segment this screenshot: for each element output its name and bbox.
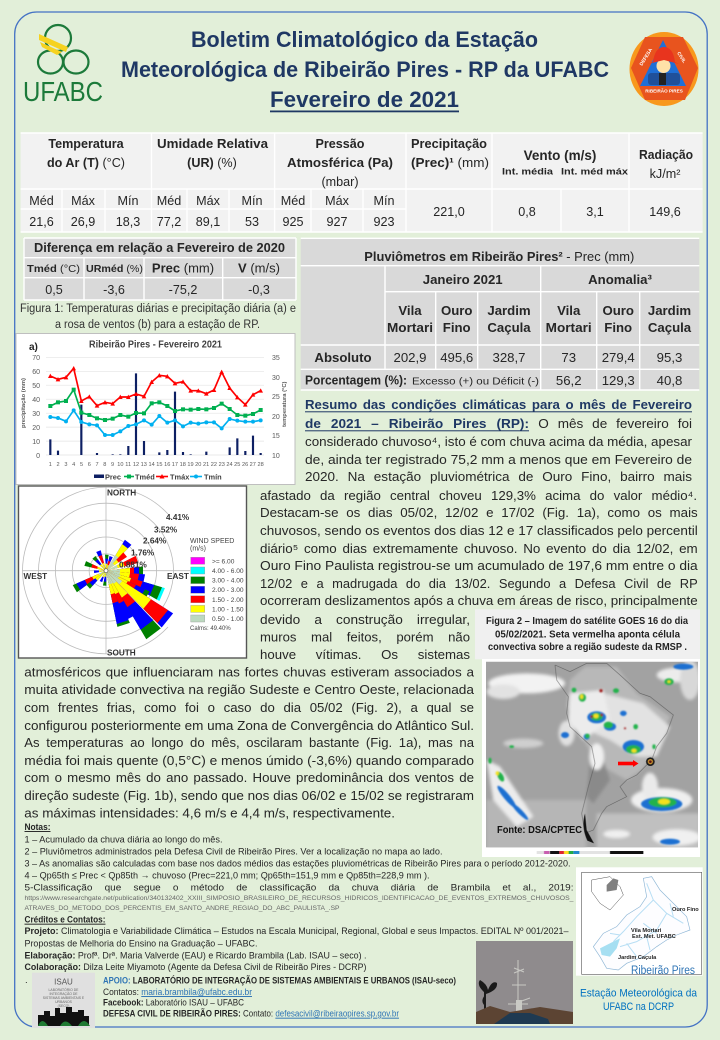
narrative lines: O mês de fevereiro foi <box>538 416 692 431</box>
percentage labels: 1.76% <box>131 549 155 558</box>
table values: Máx <box>196 194 221 208</box>
logo: ISAU laboratory <box>32 973 95 1028</box>
left axis labels: 30 <box>32 411 40 418</box>
chart b: wind rose <box>18 486 246 658</box>
wind speed legend: WIND SPEED <box>190 538 234 545</box>
table values: 3,1 <box>586 205 604 219</box>
wind speed legend: 4.00 - 6.00 <box>212 568 244 575</box>
narrative lines: muita atividade convectiva na região Sudeste e Centro Oeste, relacionada <box>24 682 475 697</box>
right axis labels: 15 <box>272 433 280 440</box>
table values: Mín <box>118 194 138 208</box>
table: difference from February 2020: -75,2 <box>169 283 197 297</box>
table values: Máx <box>71 194 96 208</box>
notes: 3 – As anomalias são calculadas com base nos dados médios das estações pluviométricas de Ribeirão Pires para o período 2012-2020. <box>24 859 570 870</box>
day labels: 7 <box>95 462 99 468</box>
support and contact block: APOIO: LABORATÓRIO DE INTEGRAÇÃO DE SISTEMAS AMBIENTAIS E URBANOS (ISAU-seco) <box>103 974 456 986</box>
day labels: 21 <box>203 462 209 468</box>
percentage labels: 2.64% <box>143 537 167 546</box>
percentage labels: 4.41% <box>166 513 190 522</box>
credits and contacts: Propostas de Melhoria do Ensino na Graduação – UFABC. <box>24 939 258 950</box>
table headers: do Ar (T) (°C) <box>47 156 125 170</box>
credits and contacts: Colaboração: Dilza Leite Miyamoto (Agente da Defesa Civil de Ribeirão Pires - DCRP) <box>24 962 366 973</box>
logo: ISAU laboratory: INTEGRAÇÃO DE <box>49 991 78 996</box>
table: difference from February 2020: -3,6 <box>103 283 125 297</box>
table: rain gauges in Ribeirão Pires: 40,8 <box>657 373 682 388</box>
left axis labels: 0 <box>36 453 40 460</box>
notes: ATRAVES_DO_METODO_DOS_PERCENTIS_EM_SANTO_ANDRE_REGIAO_DO_ABC_PAULISTA_.SP <box>24 905 340 912</box>
title: Boletim Climatológico da Estação <box>191 27 538 52</box>
notes: 1 – Acumulado da chuva diária ao longo do mês. <box>24 835 222 846</box>
narrative lines: atmosféricos que influenciaram nas fortes chuvas estiveram associados a <box>24 665 475 680</box>
left axis labels: 60 <box>32 369 40 376</box>
narrative lines: devido a construção irregular, <box>260 612 470 627</box>
narrative lines: as máximas intensidades: 4,6 m/s e 4,4 m/s, respectivamente. <box>24 805 395 820</box>
caption: weather station: Estação Meteorológica da <box>580 988 698 1000</box>
table: rain gauges in Ribeirão Pires: Excesso (+) ou Déficit (-) <box>412 376 539 388</box>
table: rain gauges in Ribeirão Pires: 56,2 <box>556 373 582 388</box>
notes: https://www.researchgate.net/publication/340132402_XXIII_SIMPOSIO_BRASILEIRO_DE_RECURSOS_HIDRICOS_IDENTIFICACAO_DE_EVENTOS_EXTREMOS_CHUVOSOS_ <box>24 895 574 902</box>
chart legend: Tmáx <box>170 472 190 482</box>
notes: 5-Classificação que segue o método de classificação da chuva diária de Brambila et al., 2019: <box>24 883 574 894</box>
day labels: 20 <box>195 462 201 468</box>
map labels: Jardim Caçula <box>618 955 657 961</box>
day labels: 9 <box>111 462 114 468</box>
day labels <box>49 462 264 468</box>
narrative lines: com o mesmo mês do ano passado. Houve predominância dos ventos de <box>24 770 474 785</box>
table values: 923 <box>373 215 395 229</box>
table: rain gauges in Ribeirão Pires: Fino <box>443 320 471 335</box>
notes: 4 – Qp65th ≤ Prec < Qp85th → chuvoso (Prec=221,0 mm; Qp65th=151,9 mm e Qp85th=228,9 mm ). <box>24 871 430 882</box>
chart a: daily temperature and precipitation: a) <box>29 342 38 353</box>
table: rain gauges in Ribeirão Pires: 73 <box>561 350 576 365</box>
text block: summary heading and climate narrative <box>24 397 698 820</box>
figure 2: GOES 16 satellite image <box>482 659 701 857</box>
day labels: 17 <box>172 462 178 468</box>
narrative lines: com frentes frias, como foi o caso do dia 05/02 (Fig. 2), a qual se <box>24 700 474 715</box>
table: rain gauges in Ribeirão Pires: Pluviômetros em Ribeirão Pires² - Prec (mm) <box>364 249 634 264</box>
table values: Méd <box>157 194 181 208</box>
day labels: 18 <box>180 462 186 468</box>
support and contact block <box>103 974 456 1020</box>
table: rain gauges in Ribeirão Pires: Janeiro 2021 <box>423 272 503 287</box>
image source label: Fonte: DSA/CPTEC <box>497 825 583 836</box>
compass labels: WEST <box>24 572 47 581</box>
table headers: Umidade Relativa <box>157 137 269 151</box>
table headers: Int. média <box>502 166 554 178</box>
narrative lines: As temperaturas ao longo do mês, oscilaram bastante (Fig. 1a), mas na <box>24 735 475 750</box>
credits and contacts: Projeto: Climatologia e Variabilidade Climática – Estudos na Escala Municipal, Regional, Global e seus Impactos. EDITAL Nº 001/2021– <box>24 926 569 937</box>
day labels: 5 <box>80 462 83 468</box>
map: Ribeirão Pires rain gauge locations <box>576 867 703 977</box>
narrative lines: Destacam-se os dias 05/02, 12/02 e 17/02 (Fig. 1a), como os mais <box>260 505 698 520</box>
title: Meteorológica de Ribeirão Pires - RP da UFABC <box>121 57 609 82</box>
logo: UFABC: UFABC <box>23 76 103 107</box>
table: difference from February 2020: Diferença em relação a Fevereiro de 2020 <box>34 240 285 255</box>
table headers: (mbar) <box>321 175 359 189</box>
notes: 2 – Pluviômetros administrados pela Defesa Civil de Ribeirão Pires. Ver a localização no mapa ao lado. <box>24 847 442 858</box>
day labels: 1 <box>49 462 52 468</box>
table values: Máx <box>325 194 350 208</box>
notes: Notas: <box>24 822 50 833</box>
compass labels <box>24 489 189 658</box>
support and contact block: Contatos: maria.brambila@ufabc.edu.br <box>103 987 253 998</box>
day labels: 28 <box>257 462 264 468</box>
table: difference from February 2020: Prec (mm) <box>152 260 214 276</box>
table: rain gauges in Ribeirão Pires: Caçula <box>648 320 692 335</box>
credits and contacts: Elaboração: Profª. Drª. Maria Valverde (EAU) e Ricardo Brambila (Lab. ISAU – seco) . <box>24 951 366 962</box>
table: monthly climate data <box>21 133 703 232</box>
figure 2 caption <box>475 609 700 659</box>
logo: Defesa Civil de Ribeirão Pires: CIVIL <box>675 51 687 65</box>
compass labels: NORTH <box>107 489 136 498</box>
table: rain gauges in Ribeirão Pires: Ouro <box>602 303 634 318</box>
map: Ribeirão Pires rain gauge locations: Ribeirão Pires <box>631 965 695 977</box>
summary heading: Resumo das condições climáticas para o mês de Fevereiro <box>305 397 692 412</box>
day labels: 14 <box>148 462 155 468</box>
credits and contacts <box>24 915 569 986</box>
day labels: 8 <box>103 462 106 468</box>
table values: 149,6 <box>649 205 681 219</box>
wind speed legend: 1.00 - 1.50 <box>212 606 244 613</box>
narrative lines: direção sudeste (Fig. 1b), sendo que nos dias 06/02 e 15/02 se registraram <box>24 788 474 803</box>
chart legend <box>94 472 222 482</box>
right axis labels: 25 <box>272 394 280 401</box>
table: difference from February 2020: V (m/s) <box>238 260 280 276</box>
day labels: 26 <box>242 462 248 468</box>
table values: 18,3 <box>116 215 140 229</box>
table: difference from February 2020: -0,3 <box>248 283 270 297</box>
logo: ISAU laboratory: SISTEMAS AMBIENTAIS E <box>43 996 85 1000</box>
arrow: red pointer to convective cell <box>618 760 638 767</box>
chart a: daily temperature and precipitation: temperatura (°C) <box>282 381 288 427</box>
table headers: Atmosférica (Pa) <box>287 156 393 170</box>
day labels: 24 <box>226 462 233 468</box>
support and contact block: DEFESA CIVIL DE RIBEIRÃO PIRES: Contato: defesacivil@ribeiraopires.sp.gov.br <box>103 1009 400 1020</box>
day labels: 15 <box>156 462 163 468</box>
wind speed legend <box>190 538 244 632</box>
logo: UFABC <box>23 25 103 107</box>
table: rain gauges in Ribeirão Pires: Porcentagem (%): <box>305 374 407 388</box>
table values <box>29 194 681 229</box>
map labels: Est. Met. UFABC <box>632 934 676 940</box>
day labels: 16 <box>164 462 170 468</box>
narrative lines: de, ainda ter registrado 75,2 mm a menos que em Fevereiro de <box>305 452 692 467</box>
table headers <box>47 137 693 189</box>
table: rain gauges in Ribeirão Pires: Vila <box>398 303 422 318</box>
day labels: 10 <box>117 462 124 468</box>
narrative lines: considerado chuvoso⁴, isto é com chuva acima da média, apesar <box>305 434 693 449</box>
table headers: (UR) (%) <box>187 156 237 170</box>
narrative lines: média foi mais quente (0,5°C) e menos úmido (-3,6%) quando comparado <box>24 753 474 768</box>
table values: 89,1 <box>196 215 220 229</box>
wind speed legend: >= 6.00 <box>212 558 235 566</box>
table values: Méd <box>281 194 305 208</box>
wind petals <box>73 540 173 639</box>
compass labels: EAST <box>167 572 189 581</box>
figure 2 caption: Figura 2 – Imagem do satélite GOES 16 do dia <box>486 616 688 627</box>
day labels: 2 <box>57 462 60 468</box>
figure 2 caption: convectiva sobre a região sudeste da RMSP . <box>488 642 687 653</box>
day labels: 13 <box>141 462 147 468</box>
day labels: 4 <box>72 462 75 468</box>
credits and contacts: Créditos e Contatos: <box>24 915 106 926</box>
table values: 77,2 <box>157 215 181 229</box>
table headers: Precipitação <box>411 137 487 151</box>
caption: figure 1: Figura 1: Temperaturas diárias e precipitação diária (a) e <box>20 303 296 315</box>
day labels: 6 <box>88 462 91 468</box>
narrative lines: chuvosos, sendo os eventos dos dias 12 e 17 classificados pelo percentil <box>260 523 698 538</box>
caption: weather station <box>580 988 698 1013</box>
table: rain gauges in Ribeirão Pires: Jardim <box>648 303 691 318</box>
narrative lines: diário⁵ como dias extremamente chuvoso. No evento do dia 12/02, em <box>260 541 698 556</box>
table: rain gauges in Ribeirão Pires <box>301 238 699 390</box>
wind speed legend: 1.50 - 2.00 <box>212 597 244 604</box>
logo: Defesa Civil de Ribeirão Pires <box>630 32 698 106</box>
wind speed legend: 2.00 - 3.00 <box>212 587 244 594</box>
table values: Mín <box>242 194 262 208</box>
day labels: 27 <box>250 462 256 468</box>
day labels: 19 <box>187 462 194 468</box>
day labels: 11 <box>125 462 131 468</box>
support and contact block: Facebook: Laboratório ISAU – UFABC <box>103 998 244 1009</box>
map labels <box>618 907 699 961</box>
logo: ISAU laboratory: (SECO) <box>58 1004 69 1008</box>
table values: 53 <box>245 215 259 229</box>
table values: Méd <box>29 194 54 208</box>
table: difference from February 2020 <box>24 238 296 300</box>
table: rain gauges in Ribeirão Pires: Ouro <box>441 303 472 318</box>
table headers: Vento (m/s) <box>524 148 596 163</box>
narrative lines: Ouro Fino Paulista registrou-se um acumulado de 197,6 mm entre o dia <box>260 558 698 573</box>
percentage labels: 0.881% <box>119 560 147 569</box>
figure 2 caption: 05/02/2021. Seta vermelha aponta célula <box>495 629 680 640</box>
table headers: kJ/m² <box>650 167 680 181</box>
narrative lines: 12/02 e a madrugada do dia 13/02. Segundo a Defesa Civil de RP <box>260 576 698 591</box>
title <box>121 27 609 112</box>
narrative lines: 2020. Na estação pluviométrica de Ouro Fino, bairro mais <box>305 469 692 484</box>
day labels: 3 <box>64 462 67 468</box>
credits and contacts: . <box>25 975 28 986</box>
caption: weather station: UFABC na DCRP <box>603 1001 674 1013</box>
table values: 0,8 <box>518 205 536 219</box>
caption: figure 1 <box>20 303 296 331</box>
summary heading: de 2021 – Ribeirão Pires (RP): <box>305 416 529 431</box>
photo: weather station at DCRP <box>476 941 573 1024</box>
table: rain gauges in Ribeirão Pires: Caçula <box>487 320 531 335</box>
narrative lines: ocorreram deslizamentos após a chuva em áreas de risco, principalmente <box>260 593 698 608</box>
chart a: daily temperature and precipitation <box>16 334 295 484</box>
chart legend: Tmín <box>204 472 222 482</box>
table: rain gauges in Ribeirão Pires: 202,9 <box>393 350 427 365</box>
table: rain gauges in Ribeirão Pires: Absoluto <box>314 350 372 365</box>
logo: Defesa Civil de Ribeirão Pires: DEFESA <box>639 47 654 67</box>
left axis labels: 40 <box>32 397 40 404</box>
map labels: Vila Mortari <box>631 928 662 934</box>
narrative lines: afastado da região central choveu 129,3% acima do valor médio⁴. <box>260 488 697 503</box>
logo: ISAU laboratory: ISAU <box>54 978 73 986</box>
table: difference from February 2020: 0,5 <box>45 283 63 297</box>
narrative lines: muros mal feitos, porém não <box>260 629 470 644</box>
day labels: 23 <box>219 462 225 468</box>
wind speed legend: (m/s) <box>190 546 206 553</box>
table: rain gauges in Ribeirão Pires: Jardim <box>487 303 531 318</box>
narrative lines <box>24 416 698 820</box>
table values: 26,9 <box>71 215 95 229</box>
table values: Mín <box>374 194 394 208</box>
narrative lines: houve vítimas. Os sistemas <box>260 647 470 662</box>
left axis labels: 10 <box>32 439 40 446</box>
right axis labels: 10 <box>272 453 280 460</box>
logo: ISAU laboratory: URBANOS <box>55 1000 73 1004</box>
logo: Defesa Civil de Ribeirão Pires: RIBEIRÃO PIRES <box>645 88 683 94</box>
chart title: Ribeirão Pires - Fevereiro 2021 <box>89 340 222 350</box>
table: rain gauges in Ribeirão Pires: Anomalia³ <box>588 272 652 287</box>
day labels: 22 <box>211 462 217 468</box>
right axis labels: 30 <box>272 375 280 382</box>
table: rain gauges in Ribeirão Pires: 495,6 <box>440 350 473 365</box>
table headers: (Prec)¹ (mm) <box>411 156 489 170</box>
narrative lines: configurou posteriormente em uma Zona de Convergência do Atlântico Sul. <box>24 718 474 733</box>
caption: figure 1: a rosa de ventos (b) para a estação de RP. <box>55 319 260 331</box>
logo: ISAU laboratory: LABORATÓRIO DE <box>49 987 79 992</box>
axis titles: precipitação (mm) <box>21 378 27 428</box>
table values: 221,0 <box>433 205 465 219</box>
right axis labels <box>272 355 280 460</box>
chart legend: Prec <box>105 472 121 482</box>
title: Fevereiro de 2021 <box>270 87 459 112</box>
right axis labels: 20 <box>272 414 280 421</box>
left axis labels <box>32 355 40 460</box>
table headers: Pressão <box>315 137 365 151</box>
table: difference from February 2020: Tméd (°C) <box>27 263 80 275</box>
left axis labels: 50 <box>32 383 40 390</box>
left axis labels: 70 <box>32 355 40 362</box>
table headers: Temperatura <box>48 137 125 151</box>
table headers: Radiação <box>639 148 693 162</box>
table values: 927 <box>326 215 348 229</box>
data series <box>50 368 261 455</box>
compass labels: SOUTH <box>107 648 136 658</box>
wind speed legend: 3.00 - 4.00 <box>212 578 244 585</box>
wind speed legend: 0.50 - 1.00 <box>212 616 244 623</box>
table: rain gauges in Ribeirão Pires: 279,4 <box>602 350 635 365</box>
notes <box>24 822 574 912</box>
left axis labels: 20 <box>32 425 40 432</box>
table: rain gauges in Ribeirão Pires: Mortari <box>387 320 433 335</box>
wind speed legend: Calms: 49.40% <box>190 626 231 632</box>
table: rain gauges in Ribeirão Pires: Fino <box>604 320 632 335</box>
table: rain gauges in Ribeirão Pires: Vila <box>557 303 581 318</box>
table: rain gauges in Ribeirão Pires: 328,7 <box>492 350 526 365</box>
right axis labels: 35 <box>272 355 280 362</box>
day labels: 25 <box>234 462 240 468</box>
table: rain gauges in Ribeirão Pires: 129,3 <box>602 373 635 388</box>
summary heading <box>305 397 692 431</box>
chart legend: Tméd <box>135 472 155 482</box>
table: rain gauges in Ribeirão Pires: 95,3 <box>657 350 682 365</box>
map labels: Ouro Fino <box>672 907 699 913</box>
day labels: 12 <box>133 462 139 468</box>
table headers: Int. méd máx <box>561 166 629 178</box>
table values: 21,6 <box>29 215 54 229</box>
percentage labels: 3.52% <box>154 525 178 534</box>
table: rain gauges in Ribeirão Pires: Mortari <box>546 320 592 335</box>
table: difference from February 2020: URméd (%) <box>86 264 143 275</box>
percentage labels <box>119 513 190 569</box>
table values: 925 <box>282 215 304 229</box>
